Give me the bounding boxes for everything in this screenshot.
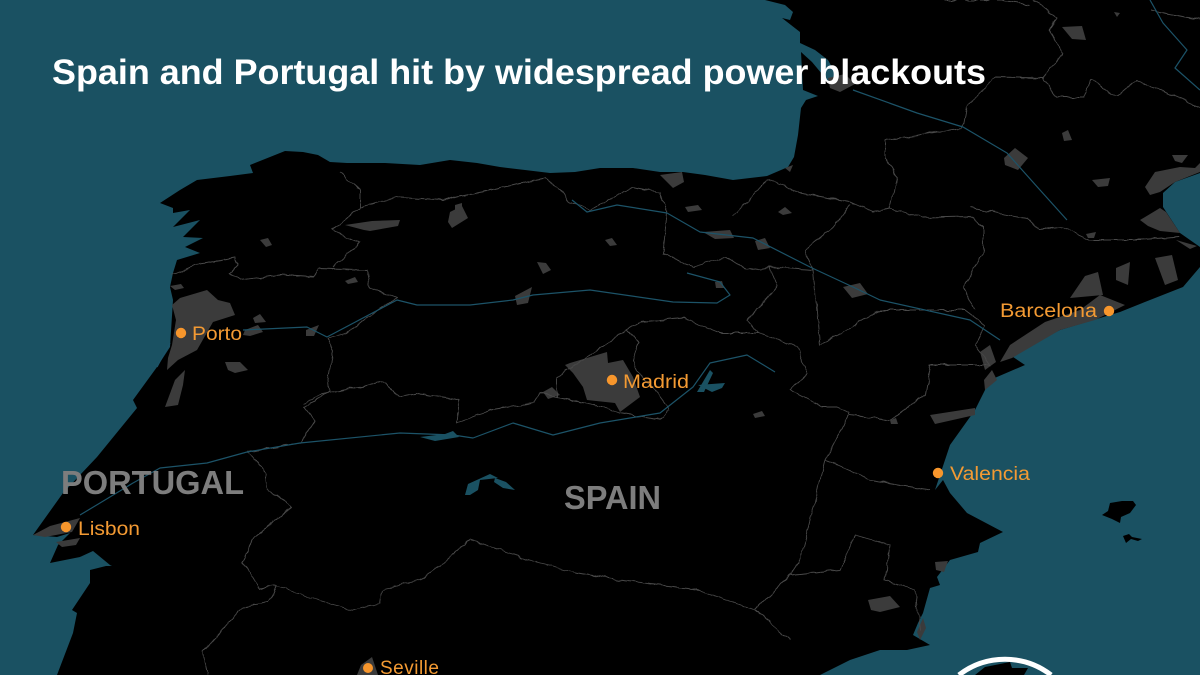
city marker: Valencia: Valencia [950,464,1030,485]
city marker: Madrid: Madrid [623,372,689,393]
title: Spain and Portugal hit by widespread power blackouts [52,53,986,92]
country label: Portugal: PORTUGAL [61,464,244,501]
country label: Spain: SPAIN [564,479,661,516]
city marker: Porto: Porto [192,324,242,345]
city marker: Barcelona: Barcelona [1000,301,1097,322]
city marker: Lisbon: Lisbon [78,519,140,540]
globe locator [959,659,1051,675]
city marker: Porto [176,324,242,345]
island: Ibiza [1102,501,1136,523]
rivers and reservoirs [80,0,1200,566]
island: Formentera [1123,534,1142,543]
